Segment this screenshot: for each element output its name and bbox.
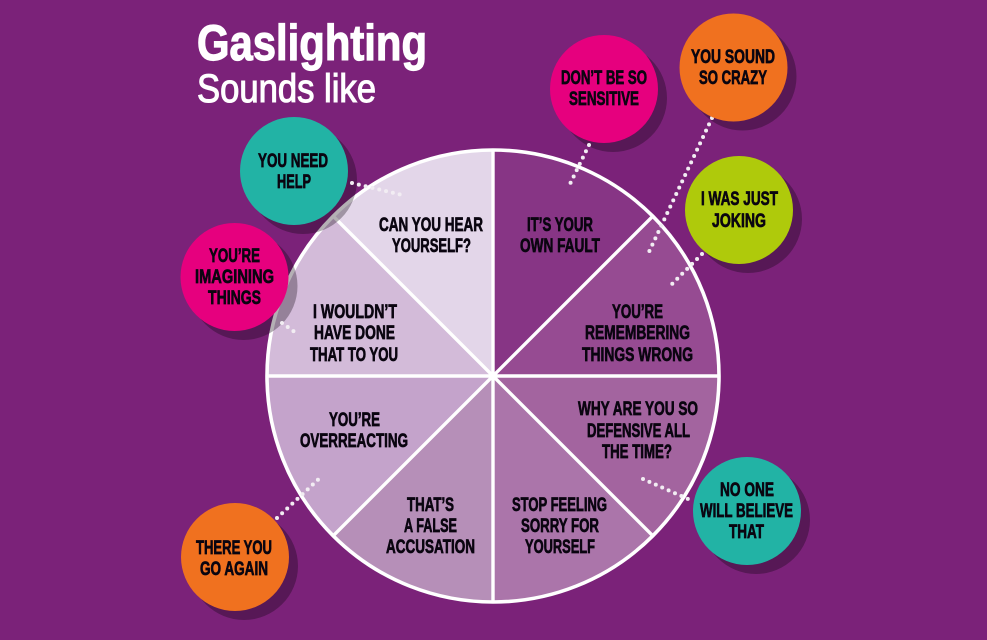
pie chart wheel (267, 150, 719, 602)
wedge: it's your own fault (493, 150, 653, 376)
bubble: don't be so sensitive: SENSITIVE (569, 88, 639, 110)
bubble: no one will believe that: NO ONE (720, 479, 774, 501)
wedge: that's a false accusation: A FALSE (404, 515, 457, 537)
bubble: you need help: HELP (277, 171, 311, 193)
wedge: it's your own fault: IT’S YOUR (527, 214, 593, 236)
wedge: stop feeling sorry for yourself: YOURSELF (525, 536, 595, 558)
bubble: i was just joking (685, 156, 793, 264)
title: Sounds like (197, 67, 376, 111)
bubble: you're imagining things (180, 223, 288, 331)
wedge: that's a false accusation (333, 376, 493, 602)
wedge: you're remembering things wrong (493, 216, 719, 376)
wedge: i wouldn't have done that to you: HAVE DONE (314, 322, 395, 344)
wedge: why are you so defensive: DEFENSIVE ALL (587, 420, 690, 442)
bubble: no one will believe that: WILL BELIEVE (700, 500, 793, 522)
wedge: why are you so defensive (493, 376, 719, 536)
bubble: you sound so crazy: YOU SOUND (691, 46, 775, 68)
bubble: don't be so sensitive: DON’T BE SO (561, 67, 647, 89)
bubble: no one will believe that: THAT (729, 521, 764, 543)
bubble: you're imagining things: IMAGINING (195, 266, 274, 288)
wedge: you're remembering things wrong: THINGS WRONG (582, 344, 693, 366)
wedge: why are you so defensive: THE TIME? (602, 441, 672, 463)
wedge: stop feeling sorry for yourself: SORRY FOR (521, 515, 599, 537)
bubble: you're imagining things: YOU’RE (209, 245, 260, 267)
wedge: you're remembering things wrong: YOU’RE (612, 301, 663, 323)
wedge: you're remembering things wrong: REMEMBERING (585, 322, 690, 344)
wedge: i wouldn't have done that to you (267, 216, 493, 376)
bubble: you need help: YOU NEED (258, 150, 328, 172)
bubble shadows (190, 22, 810, 620)
bubble: don't be so sensitive (550, 35, 658, 143)
wedge: can you hear yourself: CAN YOU HEAR (379, 214, 483, 236)
wedge: that's a false accusation: THAT’S (407, 494, 454, 516)
wedge: why are you so defensive: WHY ARE YOU SO (578, 398, 698, 420)
bubble: you sound so crazy (680, 14, 788, 122)
bubble: you're imagining things: THINGS (208, 287, 261, 309)
bubble: no one will believe that (693, 457, 801, 565)
dotted connectors (277, 118, 712, 518)
title: Gaslighting (197, 15, 427, 71)
wedge: it's your own fault: OWN FAULT (520, 235, 600, 257)
bubble: you sound so crazy: SO CRAZY (699, 67, 767, 89)
title (197, 15, 427, 111)
wedge: stop feeling sorry for yourself (493, 376, 653, 602)
wedge: i wouldn't have done that to you: THAT TO YOU (310, 344, 398, 366)
bubble: there you go again: THERE YOU (196, 537, 272, 559)
wedge: stop feeling sorry for yourself: STOP FEELING (512, 494, 607, 516)
bubble: there you go again (181, 503, 289, 611)
wedge: can you hear yourself: YOURSELF? (392, 235, 471, 257)
wedge: you're overreacting (267, 376, 493, 536)
bubble: i was just joking: I WAS JUST (701, 188, 778, 210)
bubble: i was just joking: JOKING (712, 210, 766, 232)
wedge: that's a false accusation: ACCUSATION (386, 536, 475, 558)
wedge: can you hear yourself (333, 150, 493, 376)
wedge: you're overreacting: OVERREACTING (300, 430, 408, 452)
wedge: you're overreacting: YOU’RE (329, 409, 380, 431)
wedge: i wouldn't have done that to you: I WOULDN’T (313, 301, 397, 323)
bubble: there you go again: GO AGAIN (200, 558, 268, 580)
bubble: you need help (240, 117, 348, 225)
